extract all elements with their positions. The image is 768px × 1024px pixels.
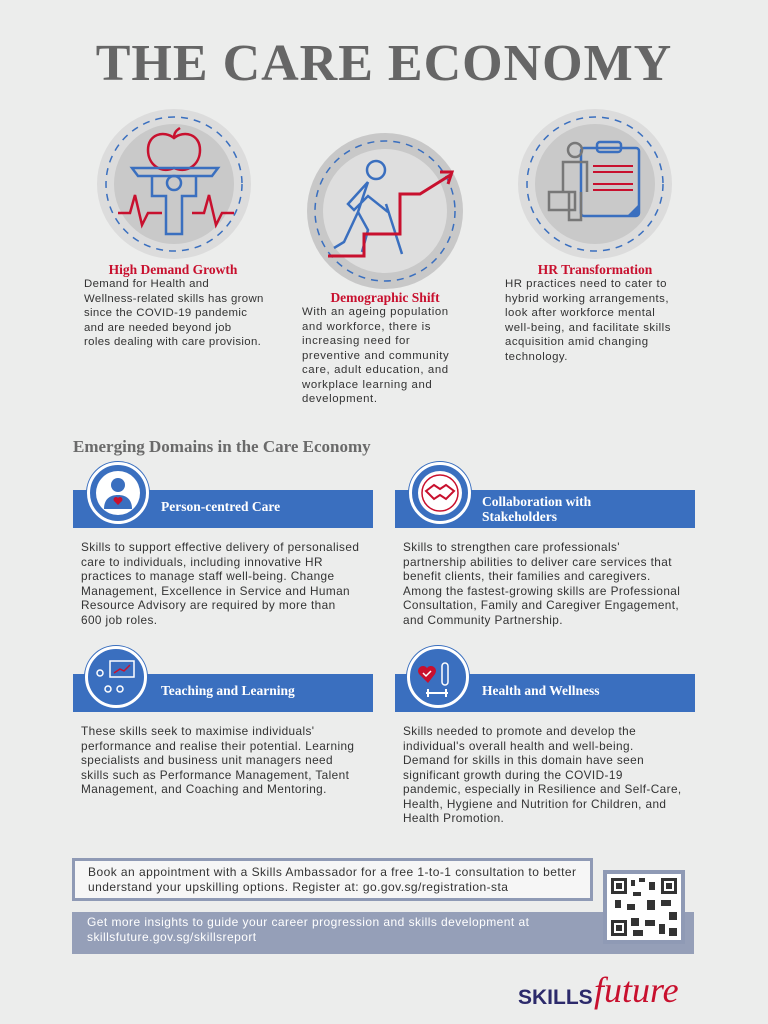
text: Consultation, Family and Caregiver Engagement, bbox=[403, 598, 679, 612]
text: Skills needed to promote and develop the bbox=[403, 724, 636, 738]
text: high demand growth bbox=[84, 278, 264, 348]
text: Skills to support effective delivery of personalised bbox=[81, 540, 359, 554]
text: hr transformation: technology. bbox=[505, 350, 568, 362]
text: demographic shift: preventive and community bbox=[302, 350, 449, 362]
heading: hr transformation: HR Transformation bbox=[538, 262, 652, 277]
text: individual's overall health and well-being. bbox=[403, 738, 634, 752]
callout: more insights bbox=[72, 912, 694, 954]
section heading: Emerging Domains in the Care Economy bbox=[73, 437, 371, 456]
bar: collaboration: Collaboration with bbox=[482, 494, 591, 509]
callout: more insights: Get more insights to guide your career progression and skills development at bbox=[87, 915, 529, 929]
text: high demand growth: Wellness-related skills has grown bbox=[84, 292, 264, 304]
callout: book appointment: Book an appointment with a Skills Ambassador for a free 1-to-1 consultation to better bbox=[88, 865, 576, 879]
panel: collaboration bbox=[395, 461, 695, 626]
qr code bbox=[603, 870, 685, 940]
icon: classroom bbox=[85, 646, 147, 708]
callout: more insights: skillsfuture.gov.sg/skillsreport bbox=[87, 930, 257, 944]
text: care to individuals, including innovative HR bbox=[81, 554, 323, 568]
text: specialists and business unit managers need bbox=[81, 753, 333, 767]
text bbox=[81, 724, 354, 796]
text: demographic shift: workplace learning and bbox=[302, 378, 432, 390]
title: THE CARE ECONOMY bbox=[96, 35, 672, 92]
panel: teaching and learning bbox=[73, 645, 373, 796]
callout: book appointment: understand your upskilling options. Register at: go.gov.sg/registration-sta bbox=[88, 880, 508, 894]
text: Among the fastest-growing skills are Professional bbox=[403, 584, 680, 598]
text: performance and realise their potential. Learning bbox=[81, 738, 354, 752]
text: Skills to strengthen care professionals' bbox=[403, 540, 620, 554]
text: pandemic, especially in Resilience and Self-Care, bbox=[403, 782, 682, 796]
text: demographic shift bbox=[302, 306, 449, 405]
logo: skillsfuture: SKILLS bbox=[518, 986, 593, 1009]
text: Management, and Coaching and Mentoring. bbox=[81, 782, 327, 796]
bar: health bbox=[395, 674, 695, 712]
text: hr transformation bbox=[505, 278, 671, 362]
text bbox=[81, 540, 359, 626]
text: and Community Partnership. bbox=[403, 612, 563, 626]
logo: skillsfuture: future bbox=[594, 970, 679, 1010]
bar: teaching: Teaching and Learning bbox=[161, 683, 295, 698]
text: 600 job roles. bbox=[81, 612, 157, 626]
text: demographic shift: care, adult education, and bbox=[302, 364, 449, 376]
logo: skillsfuture bbox=[518, 970, 679, 1010]
text: high demand growth: Demand for Health and bbox=[84, 278, 209, 290]
text: hr transformation: hybrid working arrangements, bbox=[505, 292, 669, 304]
text: hr transformation: look after workforce mental bbox=[505, 307, 655, 319]
heading: demographic shift: Demographic Shift bbox=[330, 290, 440, 305]
bar: health: Health and Wellness bbox=[482, 683, 600, 698]
icon: handshake bbox=[409, 462, 471, 524]
text: partnership abilities to deliver care services that bbox=[403, 554, 672, 568]
icon: demographic shift bbox=[307, 133, 463, 289]
text: Health Promotion. bbox=[403, 811, 504, 825]
text bbox=[403, 540, 680, 626]
panel: health and wellness bbox=[395, 645, 695, 825]
text bbox=[403, 724, 682, 825]
text: high demand growth: since the COVID-19 pandemic bbox=[84, 307, 247, 319]
text: demographic shift: development. bbox=[302, 393, 378, 405]
text: These skills seek to maximise individuals' bbox=[81, 724, 314, 738]
bar: teaching bbox=[73, 674, 373, 712]
icon: hr transformation bbox=[518, 109, 672, 259]
text: Management, Excellence in Service and Human bbox=[81, 584, 350, 598]
text: high demand growth: and are needed beyond job bbox=[84, 322, 231, 334]
text: demographic shift: With an ageing population bbox=[302, 306, 449, 318]
text: significant growth during the COVID-19 bbox=[403, 768, 623, 782]
text: hr transformation: HR practices need to cater to bbox=[505, 278, 667, 290]
text: hr transformation: well-being, and facilitate skills bbox=[505, 322, 671, 334]
text: high demand growth: roles dealing with care provision. bbox=[84, 336, 261, 348]
panel: person-centred care bbox=[73, 461, 373, 626]
text: benefit clients, their families and caregivers. bbox=[403, 569, 651, 583]
bar: collaboration bbox=[395, 490, 695, 528]
callout: book appointment bbox=[72, 858, 593, 901]
text: hr transformation: acquisition amid changing bbox=[505, 336, 649, 348]
heading: high demand growth: High Demand Growth bbox=[109, 262, 237, 277]
text: practices to manage staff well-being. Change bbox=[81, 569, 334, 583]
icon: heart dumbbell bbox=[407, 646, 469, 708]
text: demographic shift: and workforce, there is bbox=[302, 320, 431, 332]
icon: high demand growth bbox=[97, 109, 251, 259]
bar: person-centred care: Person-centred Care bbox=[161, 499, 280, 514]
bar: collaboration: Stakeholders bbox=[482, 509, 557, 524]
text: skills such as Performance Management, Talent bbox=[81, 768, 349, 782]
text: demographic shift: increasing need for bbox=[302, 335, 410, 347]
text: Demand for skills in this domain have seen bbox=[403, 753, 644, 767]
text: Health, Hygiene and Nutrition for Children, and bbox=[403, 796, 666, 810]
bar: person-centred care bbox=[73, 490, 373, 528]
text: Resource Advisory are required by more than bbox=[81, 598, 336, 612]
icon: person heart bbox=[87, 462, 149, 524]
